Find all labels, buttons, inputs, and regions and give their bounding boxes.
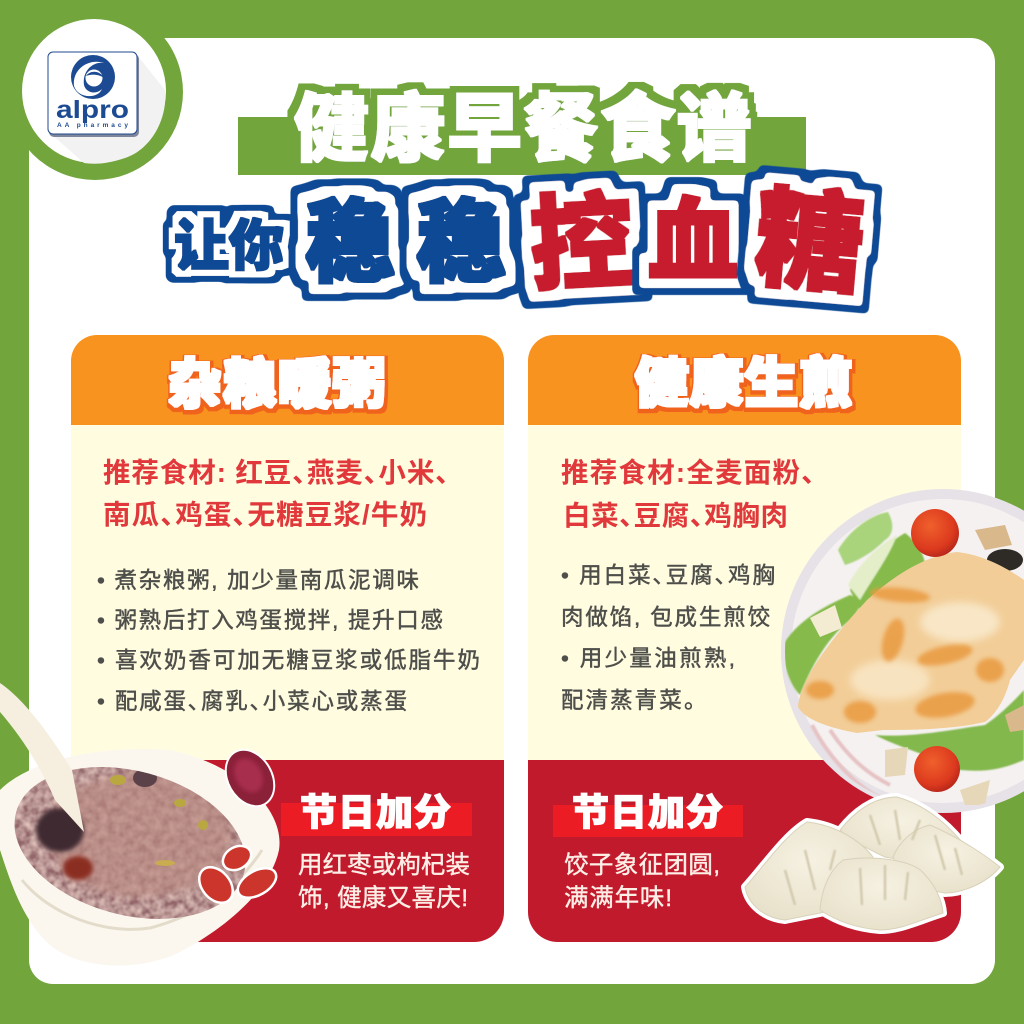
logo card xyxy=(48,52,139,137)
tomato bottom xyxy=(914,746,960,792)
illustration: dumplings xyxy=(745,797,1000,930)
method bullets: • 配咸蛋、腐乳、小菜心或蒸蛋 xyxy=(97,689,407,714)
festive note xyxy=(298,851,470,912)
recommended ingredients: 南瓜、鸡蛋、无糖豆浆/牛奶 xyxy=(103,499,427,530)
chicken breast xyxy=(798,552,1024,733)
recommended ingredients xyxy=(561,457,815,531)
panel heading: 健康生煎 xyxy=(635,339,853,418)
grill marks xyxy=(806,585,1004,723)
festive ribbon xyxy=(281,803,472,836)
lettuce xyxy=(783,512,1024,771)
panel cream background xyxy=(528,400,961,790)
logo wordmark: alpro xyxy=(56,96,129,124)
red date xyxy=(215,740,285,816)
festive heading: 节日加分 xyxy=(572,782,723,836)
title ribbon xyxy=(238,117,806,175)
small words: 让你 xyxy=(174,201,284,281)
festive note: 用红枣或枸杞装 xyxy=(298,851,470,879)
title line 2 xyxy=(174,152,871,316)
illustration: chicken salad plate xyxy=(781,489,1024,813)
logo badge xyxy=(7,4,183,180)
tofu cubes xyxy=(810,525,1024,805)
festive ribbon xyxy=(553,805,743,837)
method bullets xyxy=(97,568,480,714)
method bullets: • 煮杂粮粥, 加少量南瓜泥调味 xyxy=(97,568,419,593)
method bullets: • 用少量油煎熟, xyxy=(561,646,735,671)
porridge xyxy=(14,767,246,919)
method bullets: • 粥熟后打入鸡蛋搅拌, 提升口感 xyxy=(97,608,443,633)
method bullets: • 喜欢奶香可加无糖豆浆或低脂牛奶 xyxy=(97,648,480,673)
logo symbol xyxy=(71,55,115,99)
festive note: 饺子象征团圆, xyxy=(564,851,720,879)
bowl xyxy=(0,749,280,966)
dumpling bodies xyxy=(745,797,1000,930)
dumpling pleats xyxy=(785,810,962,905)
panel: healthy pan-fried dumplings xyxy=(528,335,961,942)
recommended ingredients: 推荐食材: 红豆、燕麦、小米、 xyxy=(103,457,449,488)
festive red box xyxy=(130,760,504,942)
festive red box xyxy=(528,760,961,942)
recommended ingredients: 白菜、豆腐、鸡胸肉 xyxy=(563,500,788,531)
word: control: 控 xyxy=(526,156,638,313)
panel orange header xyxy=(528,335,961,425)
method bullets: 肉做馅, 包成生煎饺 xyxy=(561,605,770,630)
word: blood: 血 xyxy=(648,168,738,298)
olive xyxy=(987,549,1023,571)
panel orange header xyxy=(71,335,504,425)
word: sugar: 糖 xyxy=(750,152,871,316)
method bullets: 配清蒸青菜。 xyxy=(561,688,695,713)
dumpling white outline xyxy=(745,797,1000,930)
plate sauce smears xyxy=(812,725,890,800)
illustration: porridge bowl with spoon xyxy=(0,683,285,966)
spoon xyxy=(0,683,84,832)
title line 1: 健康早餐食谱 xyxy=(294,68,753,177)
method bullets xyxy=(561,563,775,713)
logo tagline: AA pharmacy xyxy=(57,122,128,129)
method bullets: • 用白菜、豆腐、鸡胸 xyxy=(561,563,775,588)
panel heading: 杂粮暖粥 xyxy=(168,340,386,419)
festive note: 满满年味! xyxy=(564,884,672,912)
festive note: 饰, 健康又喜庆! xyxy=(298,884,468,912)
word: steady 2: 稳 xyxy=(416,170,506,300)
recommended ingredients xyxy=(103,457,449,530)
tomato top xyxy=(911,509,959,557)
festive note xyxy=(564,851,720,912)
panel cream background xyxy=(71,400,504,790)
panel: multigrain porridge xyxy=(71,335,504,942)
festive heading: 节日加分 xyxy=(300,782,451,836)
word: steady 1: 稳 xyxy=(305,170,395,300)
goji berry 3 xyxy=(233,862,281,904)
recommended ingredients: 推荐食材:全麦面粉、 xyxy=(561,457,815,488)
goji berry 1 xyxy=(219,841,255,875)
goji berry 2 xyxy=(192,861,240,909)
